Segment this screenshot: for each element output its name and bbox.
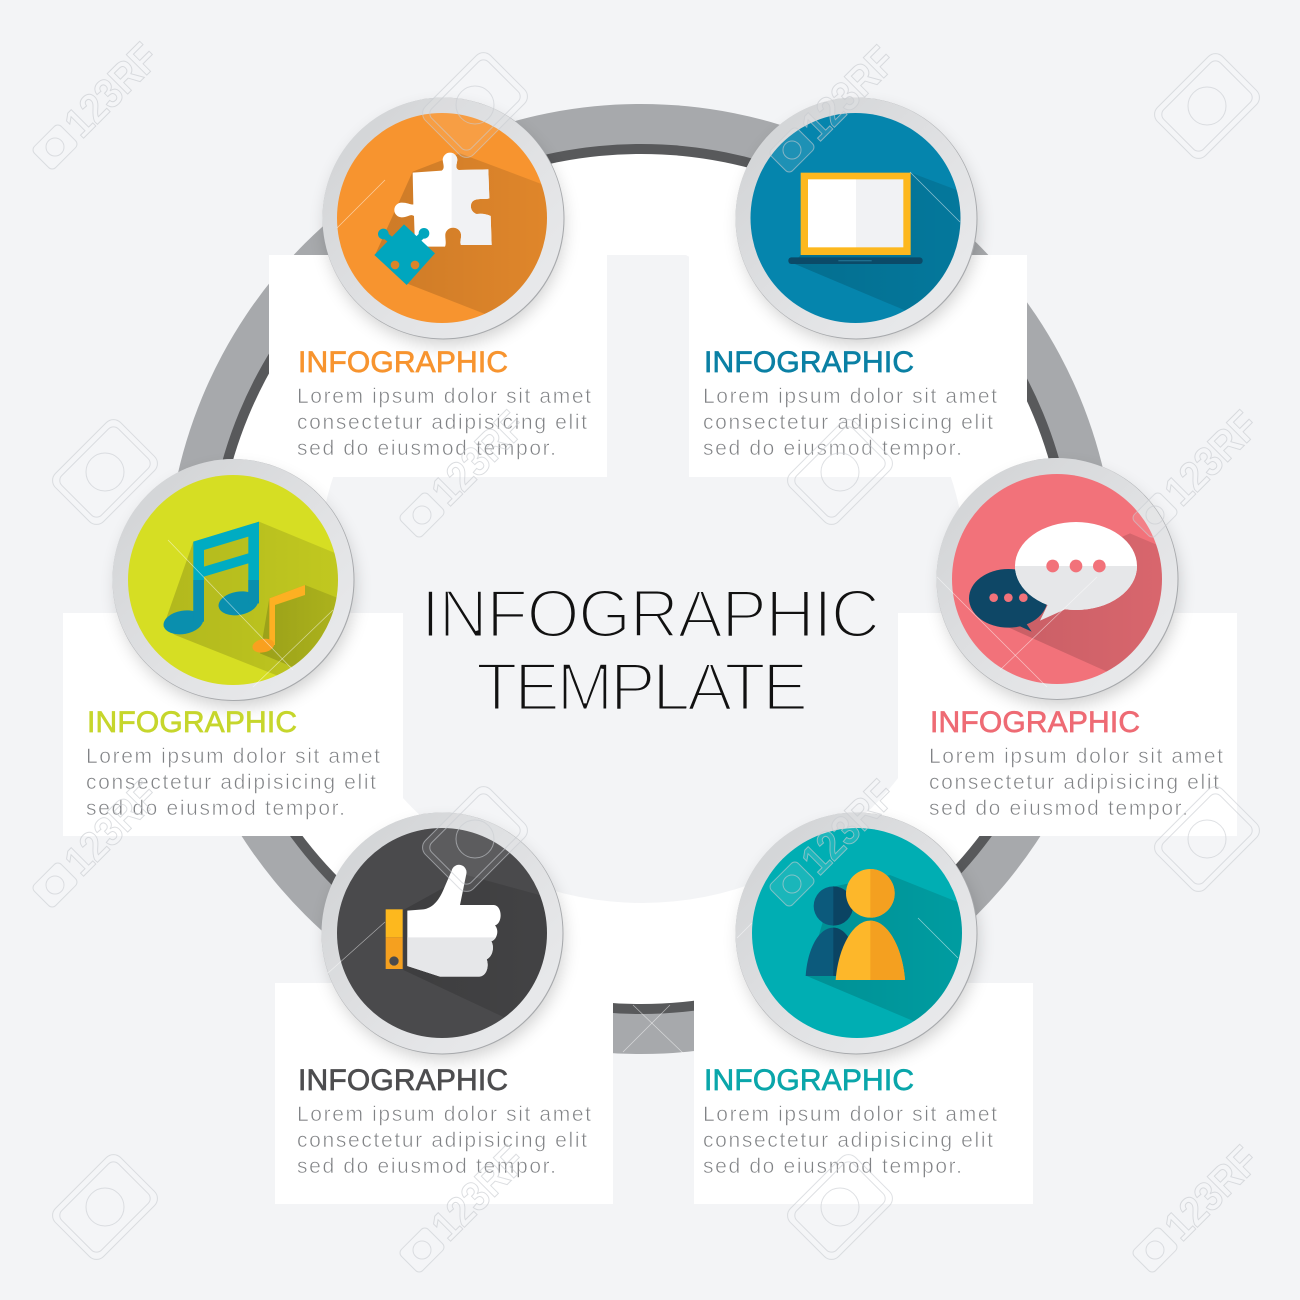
body text: consectetur adipisicing elit <box>703 411 993 434</box>
body text <box>703 1103 997 1178</box>
body text: Lorem ipsum dolor sit amet <box>703 1103 997 1126</box>
icon: people <box>806 869 905 980</box>
long shadow <box>376 154 547 314</box>
body text: consectetur adipisicing elit <box>703 1129 993 1152</box>
watermarks: 123RF <box>792 37 904 149</box>
watermarks: 123RF <box>792 771 904 883</box>
light column between top panels <box>607 255 689 478</box>
long shadow <box>807 875 962 1021</box>
heading: INFOGRAPHIC <box>704 1064 914 1097</box>
long shadow <box>795 173 960 310</box>
watermarks: 123RF <box>55 34 167 146</box>
body text <box>86 745 380 820</box>
icon: music notes <box>162 522 305 654</box>
body text: sed do eiusmod tempor. <box>297 1155 556 1178</box>
body text <box>297 1103 591 1178</box>
body text: sed do eiusmod tempor. <box>929 797 1188 820</box>
panel: teal people <box>703 812 997 1178</box>
body text: consectetur adipisicing elit <box>297 411 587 434</box>
panel: coral speech <box>929 458 1223 820</box>
icon: thumbs up <box>386 865 501 977</box>
body text: sed do eiusmod tempor. <box>703 1155 962 1178</box>
body text <box>297 385 591 460</box>
body text: Lorem ipsum dolor sit amet <box>929 745 1223 768</box>
heading: INFOGRAPHIC <box>930 706 1140 739</box>
heading: INFOGRAPHIC <box>704 346 914 379</box>
title: INFOGRAPHIC <box>421 576 880 652</box>
body text: consectetur adipisicing elit <box>929 771 1219 794</box>
white panels <box>63 245 1237 1204</box>
heading: INFOGRAPHIC <box>87 706 297 739</box>
body text <box>703 385 997 460</box>
body text: sed do eiusmod tempor. <box>297 437 556 460</box>
watermarks: 123RF <box>55 772 167 884</box>
panel: dark thumbs up <box>297 812 591 1178</box>
body text: Lorem ipsum dolor sit amet <box>703 385 997 408</box>
body text: Lorem ipsum dolor sit amet <box>297 1103 591 1126</box>
body text: consectetur adipisicing elit <box>297 1129 587 1152</box>
body text: sed do eiusmod tempor. <box>703 437 962 460</box>
panel: green music <box>86 459 380 820</box>
heading: INFOGRAPHIC <box>298 1064 508 1097</box>
long shadow <box>404 876 547 1017</box>
body text: Lorem ipsum dolor sit amet <box>297 385 591 408</box>
panel: blue laptop <box>703 98 997 460</box>
icon: puzzle pieces <box>374 153 492 285</box>
body text <box>929 745 1223 820</box>
watermarks: 123RF <box>422 402 534 514</box>
ring <box>166 104 1116 1054</box>
hairline diagonal marks <box>168 172 1097 1053</box>
long shadow <box>1009 534 1162 672</box>
body text: consectetur adipisicing elit <box>86 771 376 794</box>
body text: sed do eiusmod tempor. <box>86 797 345 820</box>
watermarks: 123RF <box>422 1137 534 1249</box>
central light disc <box>317 253 967 903</box>
icon: laptop <box>788 173 923 264</box>
heading: INFOGRAPHIC <box>298 346 508 379</box>
title <box>421 576 880 725</box>
title: TEMPLATE <box>476 649 808 725</box>
watermarks: 123RF <box>1155 1137 1267 1249</box>
panel: orange puzzle <box>297 98 591 460</box>
long shadow <box>164 522 338 676</box>
watermarks: 123RF <box>1155 402 1267 514</box>
body text: Lorem ipsum dolor sit amet <box>86 745 380 768</box>
icon: speech bubbles <box>969 522 1137 632</box>
